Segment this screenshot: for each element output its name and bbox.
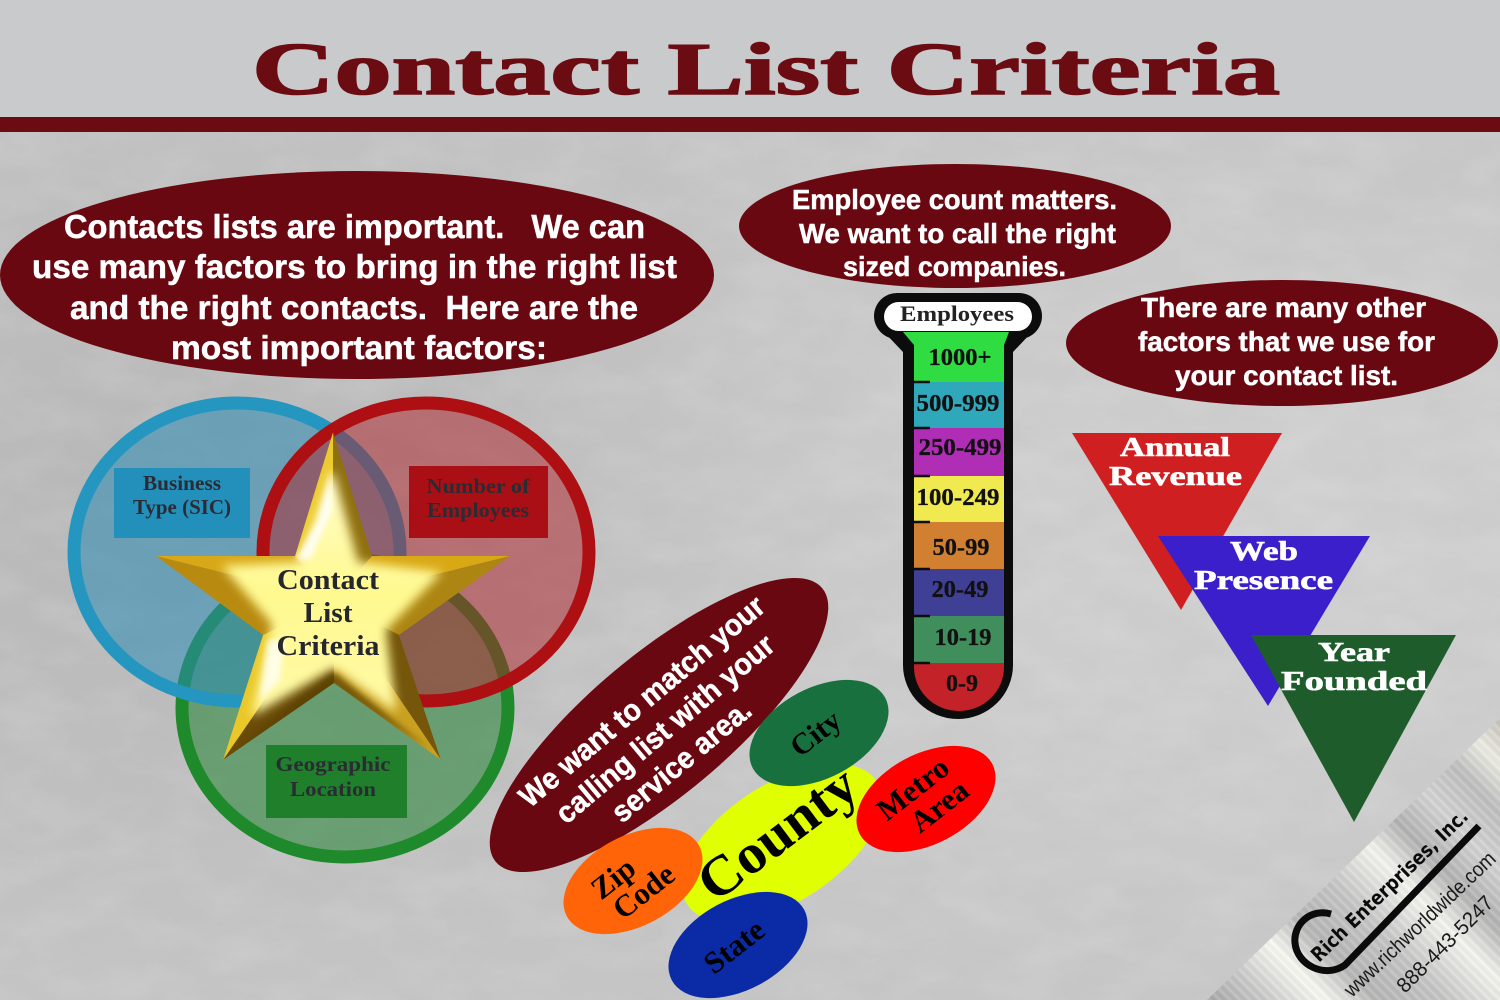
triangle: year founded <box>1251 635 1456 822</box>
callout: service area: calling list with your <box>549 628 782 830</box>
label: business type <box>114 468 250 538</box>
ellipse: state: State <box>697 912 771 981</box>
callout: service area: We want to match your <box>513 589 772 814</box>
callout: service area <box>451 534 867 916</box>
triangle: annual revenue: Revenue <box>1109 461 1242 491</box>
callout: intro: use many factors to bring in the right list <box>32 248 677 285</box>
callout: other factors: your contact list. <box>1175 360 1398 391</box>
band: 20-49: 20-49 <box>932 577 988 603</box>
icon: gold star <box>156 432 510 760</box>
band: 100-249 <box>914 476 1004 522</box>
band: 10-19 <box>914 616 1004 663</box>
label: number of employees: Number of <box>426 474 531 498</box>
triangle: year founded: Founded <box>1281 666 1427 696</box>
band: 20-49 <box>914 569 1004 616</box>
ellipse: county <box>655 732 909 954</box>
ellipse: zip code: Code <box>606 856 681 926</box>
title: Contact List Criteria <box>252 29 1280 111</box>
band: 1000+: 1000+ <box>928 345 992 371</box>
label: geographic location: Geographic <box>276 752 390 776</box>
triangle: annual revenue <box>1072 432 1282 610</box>
callout: employee count: sized companies. <box>843 251 1066 282</box>
icon: logo swoosh <box>1295 826 1479 971</box>
geography ellipses <box>546 658 1013 1000</box>
star label <box>276 564 380 662</box>
ellipse: metro area <box>839 724 1013 874</box>
ellipse: metro area: Area <box>903 772 976 840</box>
callout: intro: Contacts lists are important. We can <box>64 208 645 245</box>
band: 100-249: 100-249 <box>916 485 1000 511</box>
star label: Criteria <box>276 630 380 662</box>
test tube chart: employees <box>874 293 1042 719</box>
cap label: Employees <box>900 301 1014 326</box>
ellipse: state <box>651 870 825 1000</box>
band: 50-99: 50-99 <box>932 535 990 561</box>
band: 250-499 <box>914 428 1004 476</box>
triangle: annual revenue: Annual <box>1120 432 1231 462</box>
callout: other factors: There are many other <box>1141 292 1426 323</box>
band: 250-499: 250-499 <box>918 435 1002 461</box>
band: 0-9: 0-9 <box>946 671 978 697</box>
label: number of employees <box>409 466 548 538</box>
label: geographic location <box>266 745 407 818</box>
callout: service area: service area. <box>605 693 758 829</box>
callout: employee count <box>739 164 1171 288</box>
label: geographic location: Location <box>290 777 376 801</box>
ellipse: city: City <box>784 704 848 764</box>
circle: business type <box>74 403 400 701</box>
company name: Rich Enterprises, Inc. <box>1306 804 1473 967</box>
callout: intro <box>0 171 714 379</box>
callout: employee count: Employee count matters. <box>792 184 1117 215</box>
triangle: web presence: Web <box>1230 536 1298 566</box>
brushed metal strip <box>1207 718 1500 1000</box>
ellipse: city <box>732 658 906 808</box>
venn diagram <box>74 403 589 857</box>
triangle: year founded: Year <box>1318 637 1390 667</box>
circle: geographic location <box>182 559 508 857</box>
tube outline <box>884 332 1032 719</box>
ellipse: metro area: Metro <box>870 749 956 828</box>
band: 50-99 <box>914 522 1004 569</box>
header band <box>0 0 1500 132</box>
ellipse: county: County <box>685 754 870 914</box>
callout: intro: most important factors: <box>171 329 547 366</box>
band: 500-999 <box>914 382 1004 428</box>
triangle: web presence <box>1158 536 1370 706</box>
callout: intro: and the right contacts. Here are the <box>70 289 638 326</box>
cap label <box>884 301 1032 331</box>
label: business type: Type (SIC) <box>133 495 231 519</box>
callout: other factors <box>1066 280 1498 406</box>
circle: number of employees <box>263 403 589 701</box>
band: 0-9 <box>914 663 1004 711</box>
ellipse: zip code: Zip <box>584 850 642 906</box>
band: 10-19: 10-19 <box>934 625 992 651</box>
star label: Contact <box>277 564 379 596</box>
logo band <box>1207 718 1500 1000</box>
band: 1000+ <box>903 332 1009 382</box>
star label: List <box>304 597 353 629</box>
triangle: web presence: Presence <box>1194 565 1333 595</box>
band: 500-999: 500-999 <box>916 391 1000 417</box>
phone: 888-443-5247 <box>1392 891 1498 998</box>
callout: other factors: factors that we use for <box>1138 326 1435 357</box>
callout: employee count: We want to call the right <box>799 218 1116 249</box>
label: business type: Business <box>143 471 221 495</box>
ellipse: zip code <box>546 806 720 956</box>
label: number of employees: Employees <box>427 498 529 522</box>
